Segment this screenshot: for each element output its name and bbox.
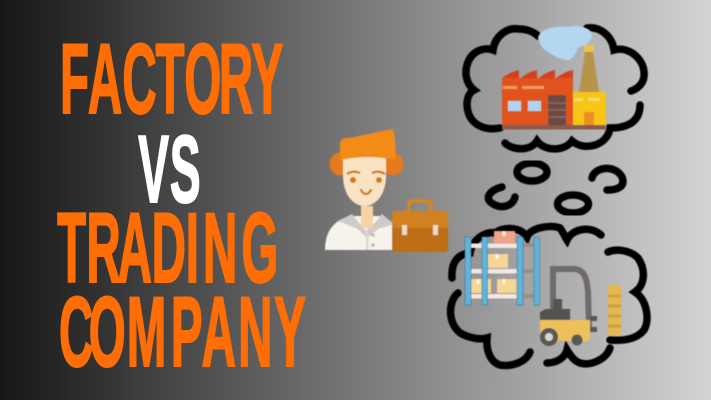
boxes bbox=[494, 231, 515, 243]
thought bubble: factory bbox=[466, 28, 644, 149]
icon: forklift bbox=[540, 269, 621, 346]
big wheel bbox=[540, 328, 558, 346]
heading: trading: TRADING bbox=[57, 194, 278, 304]
back shelves bbox=[523, 245, 534, 296]
heading: vs: VS bbox=[138, 115, 201, 222]
hair bbox=[340, 129, 396, 160]
roof teeth bbox=[502, 70, 573, 78]
thought connector bubbles bbox=[488, 163, 623, 213]
eyebrows bbox=[347, 172, 385, 174]
briefcase handle bbox=[409, 201, 431, 215]
driver seat bbox=[540, 299, 570, 320]
main building bbox=[502, 78, 573, 125]
smoke cloud bbox=[538, 26, 592, 60]
icon: businessman with briefcase bbox=[325, 129, 448, 252]
side hair bbox=[330, 152, 350, 176]
title bbox=[57, 25, 306, 388]
briefcase bbox=[392, 211, 448, 252]
small wheel bbox=[572, 334, 582, 346]
body bbox=[325, 216, 400, 250]
chimney bbox=[579, 52, 599, 92]
box tapes bbox=[478, 231, 504, 284]
smile bbox=[361, 190, 371, 194]
body bbox=[540, 320, 590, 341]
building stripes bbox=[503, 86, 517, 89]
yellow annex bbox=[573, 92, 606, 125]
shelf boards bbox=[471, 244, 517, 248]
mast bbox=[553, 269, 589, 328]
posts bbox=[465, 237, 471, 305]
icon: factory bbox=[502, 26, 606, 129]
face bbox=[343, 150, 386, 206]
heading: company: COMPANY bbox=[59, 278, 306, 388]
thought bubble: warehouse bbox=[451, 226, 647, 365]
base strip bbox=[502, 125, 606, 130]
eyes bbox=[350, 177, 356, 183]
dark door bbox=[548, 95, 566, 125]
heading: factory: FACTORY bbox=[60, 25, 283, 135]
icon: warehouse shelf bbox=[465, 231, 540, 305]
pallet stack bbox=[608, 285, 621, 335]
windows bbox=[508, 101, 521, 111]
forks bbox=[590, 316, 597, 321]
